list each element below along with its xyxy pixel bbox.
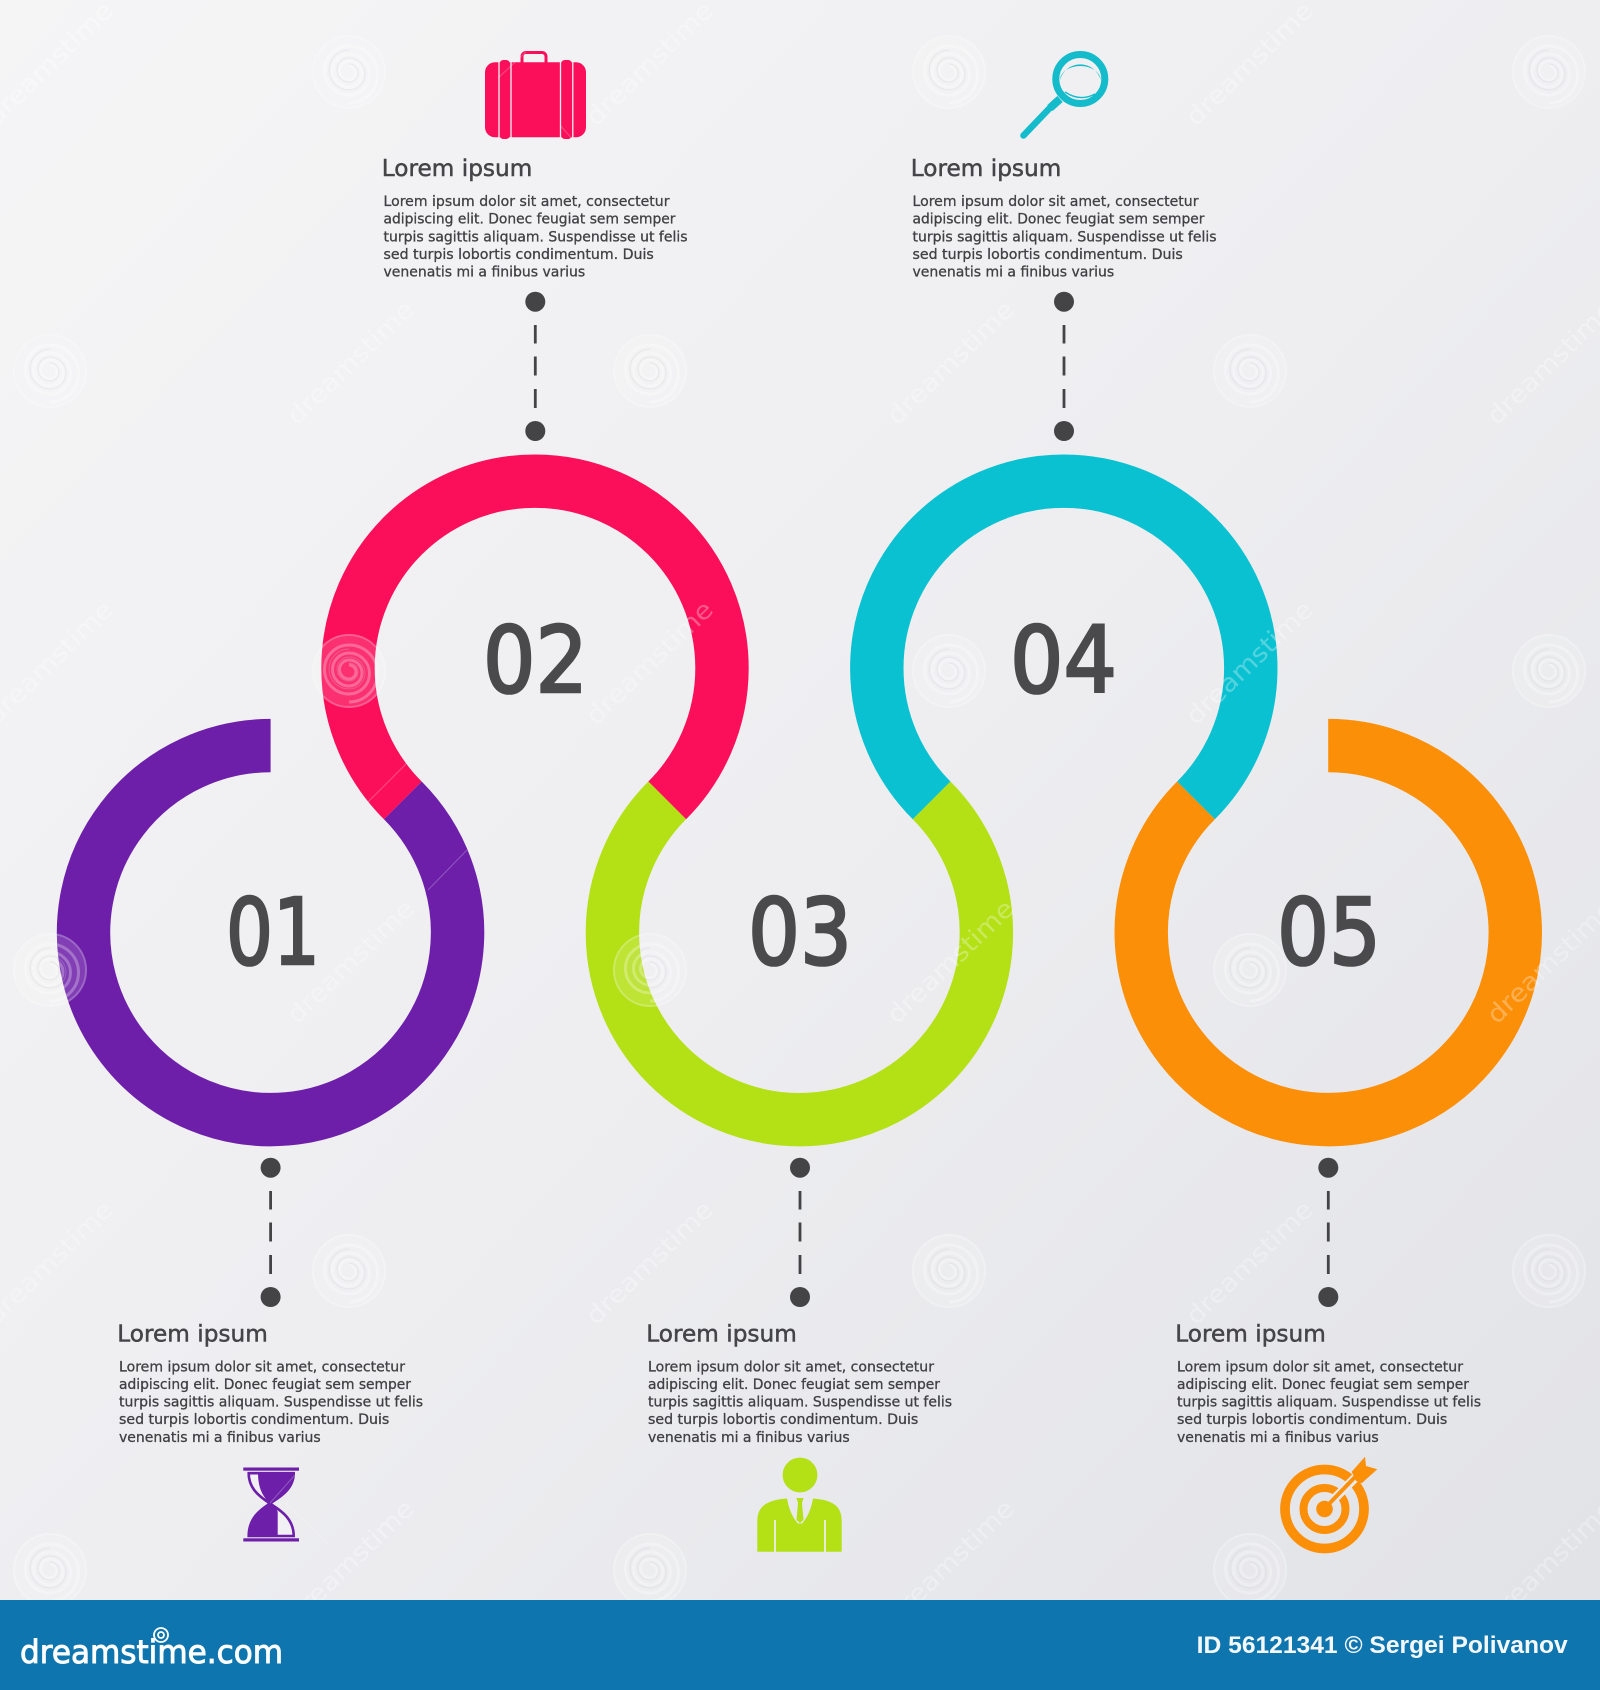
watermark pattern: dreamstime bbox=[1180, 595, 1319, 730]
text block 01: Lorem ipsum bbox=[117, 1322, 268, 1348]
watermark pattern: dreamstime bbox=[580, 595, 719, 730]
connector 04 bbox=[1054, 292, 1074, 441]
watermark pattern: dreamstime bbox=[881, 1494, 1020, 1629]
text block 04: venenatis mi a finibus varius bbox=[912, 264, 1114, 280]
number 05: 05 bbox=[1277, 879, 1381, 986]
watermark pattern: dreamstime bbox=[881, 894, 1020, 1029]
text block 01: turpis sagittis aliquam. Suspendisse ut felis bbox=[119, 1395, 423, 1411]
text block 04: Lorem ipsum dolor sit amet, consectetur bbox=[912, 194, 1199, 210]
number 02: 02 bbox=[483, 607, 588, 714]
text block 01: adipiscing elit. Donec feugiat sem semper bbox=[119, 1377, 411, 1393]
text block 05: turpis sagittis aliquam. Suspendisse ut felis bbox=[1177, 1395, 1481, 1411]
text block 02: Lorem ipsum dolor sit amet, consectetur bbox=[384, 194, 670, 210]
watermark pattern: dreamstime bbox=[1180, 1195, 1319, 1330]
text block 01: venenatis mi a finibus varius bbox=[119, 1430, 321, 1446]
logo text: dreamstime.com bbox=[20, 1633, 283, 1671]
icon: businessman bbox=[757, 1458, 842, 1552]
text block 04: adipiscing elit. Donec feugiat sem semper bbox=[912, 212, 1205, 228]
watermark pattern: dreamstime bbox=[1180, 0, 1319, 131]
text block 04: Lorem ipsum bbox=[911, 156, 1061, 182]
text block 01: Lorem ipsum dolor sit amet, consectetur bbox=[119, 1360, 405, 1376]
footer banner bbox=[0, 1600, 1600, 1690]
connector 03 bbox=[790, 1158, 810, 1307]
ring 02 pink bbox=[348, 481, 722, 800]
connector 05 bbox=[1318, 1158, 1338, 1307]
ring 05 orange bbox=[1141, 746, 1515, 1120]
watermark pattern: dreamstime bbox=[881, 295, 1020, 430]
text block 04: sed turpis lobortis condimentum. Duis bbox=[912, 247, 1183, 263]
text block 05: venenatis mi a finibus varius bbox=[1177, 1430, 1379, 1446]
text block 03: Lorem ipsum bbox=[646, 1322, 797, 1348]
watermark pattern: dreamstime bbox=[281, 1494, 420, 1629]
text block 02: turpis sagittis aliquam. Suspendisse ut felis bbox=[384, 229, 688, 245]
watermark pattern: dreamstime bbox=[281, 295, 420, 430]
ring 03 lime bbox=[612, 800, 986, 1120]
icon: suitcase bbox=[485, 52, 586, 139]
text block 02: sed turpis lobortis condimentum. Duis bbox=[384, 247, 654, 263]
image credit: ID 56121341 © Sergei Polivanov bbox=[1197, 1632, 1568, 1659]
text block 03: turpis sagittis aliquam. Suspendisse ut felis bbox=[648, 1395, 952, 1411]
text block 02: Lorem ipsum bbox=[382, 156, 532, 182]
text block 05: sed turpis lobortis condimentum. Duis bbox=[1177, 1412, 1447, 1428]
text block 05 bbox=[1175, 1322, 1481, 1446]
ring 01 purple bbox=[84, 746, 458, 1120]
text block 02: adipiscing elit. Donec feugiat sem semper bbox=[384, 212, 676, 228]
text block 04 bbox=[911, 156, 1216, 280]
watermark pattern: dreamstime bbox=[580, 1195, 719, 1330]
text block 05: Lorem ipsum bbox=[1175, 1322, 1326, 1348]
number 03: 03 bbox=[748, 879, 852, 986]
text block 01: sed turpis lobortis condimentum. Duis bbox=[119, 1412, 389, 1428]
icon: target with arrow bbox=[1285, 1457, 1377, 1548]
text block 05: Lorem ipsum dolor sit amet, consectetur bbox=[1177, 1360, 1463, 1376]
text block 01 bbox=[117, 1322, 423, 1446]
text block 03: Lorem ipsum dolor sit amet, consectetur bbox=[648, 1360, 934, 1376]
text block 02: venenatis mi a finibus varius bbox=[384, 264, 585, 280]
icon: hourglass bbox=[243, 1468, 299, 1542]
text block 02 bbox=[382, 156, 688, 280]
text block 03: sed turpis lobortis condimentum. Duis bbox=[648, 1412, 918, 1428]
connector 02 bbox=[525, 292, 545, 441]
watermark pattern: dreamstime bbox=[580, 0, 719, 131]
icon: magnifier bbox=[1024, 54, 1105, 136]
number 04: 04 bbox=[1010, 607, 1117, 714]
ring 04 teal bbox=[877, 481, 1251, 800]
text block 04: turpis sagittis aliquam. Suspendisse ut felis bbox=[912, 229, 1216, 245]
text block 05: adipiscing elit. Donec feugiat sem semper bbox=[1177, 1377, 1469, 1393]
number 01: 01 bbox=[226, 879, 320, 986]
text block 03: venenatis mi a finibus varius bbox=[648, 1430, 850, 1446]
ribbon of five rings bbox=[84, 481, 1515, 1120]
connector 01 bbox=[261, 1158, 281, 1307]
watermark pattern: dreamstime bbox=[281, 894, 420, 1029]
text block 03: adipiscing elit. Donec feugiat sem semper bbox=[648, 1377, 940, 1393]
logo spiral bbox=[154, 1628, 168, 1642]
text block 03 bbox=[646, 1322, 952, 1446]
